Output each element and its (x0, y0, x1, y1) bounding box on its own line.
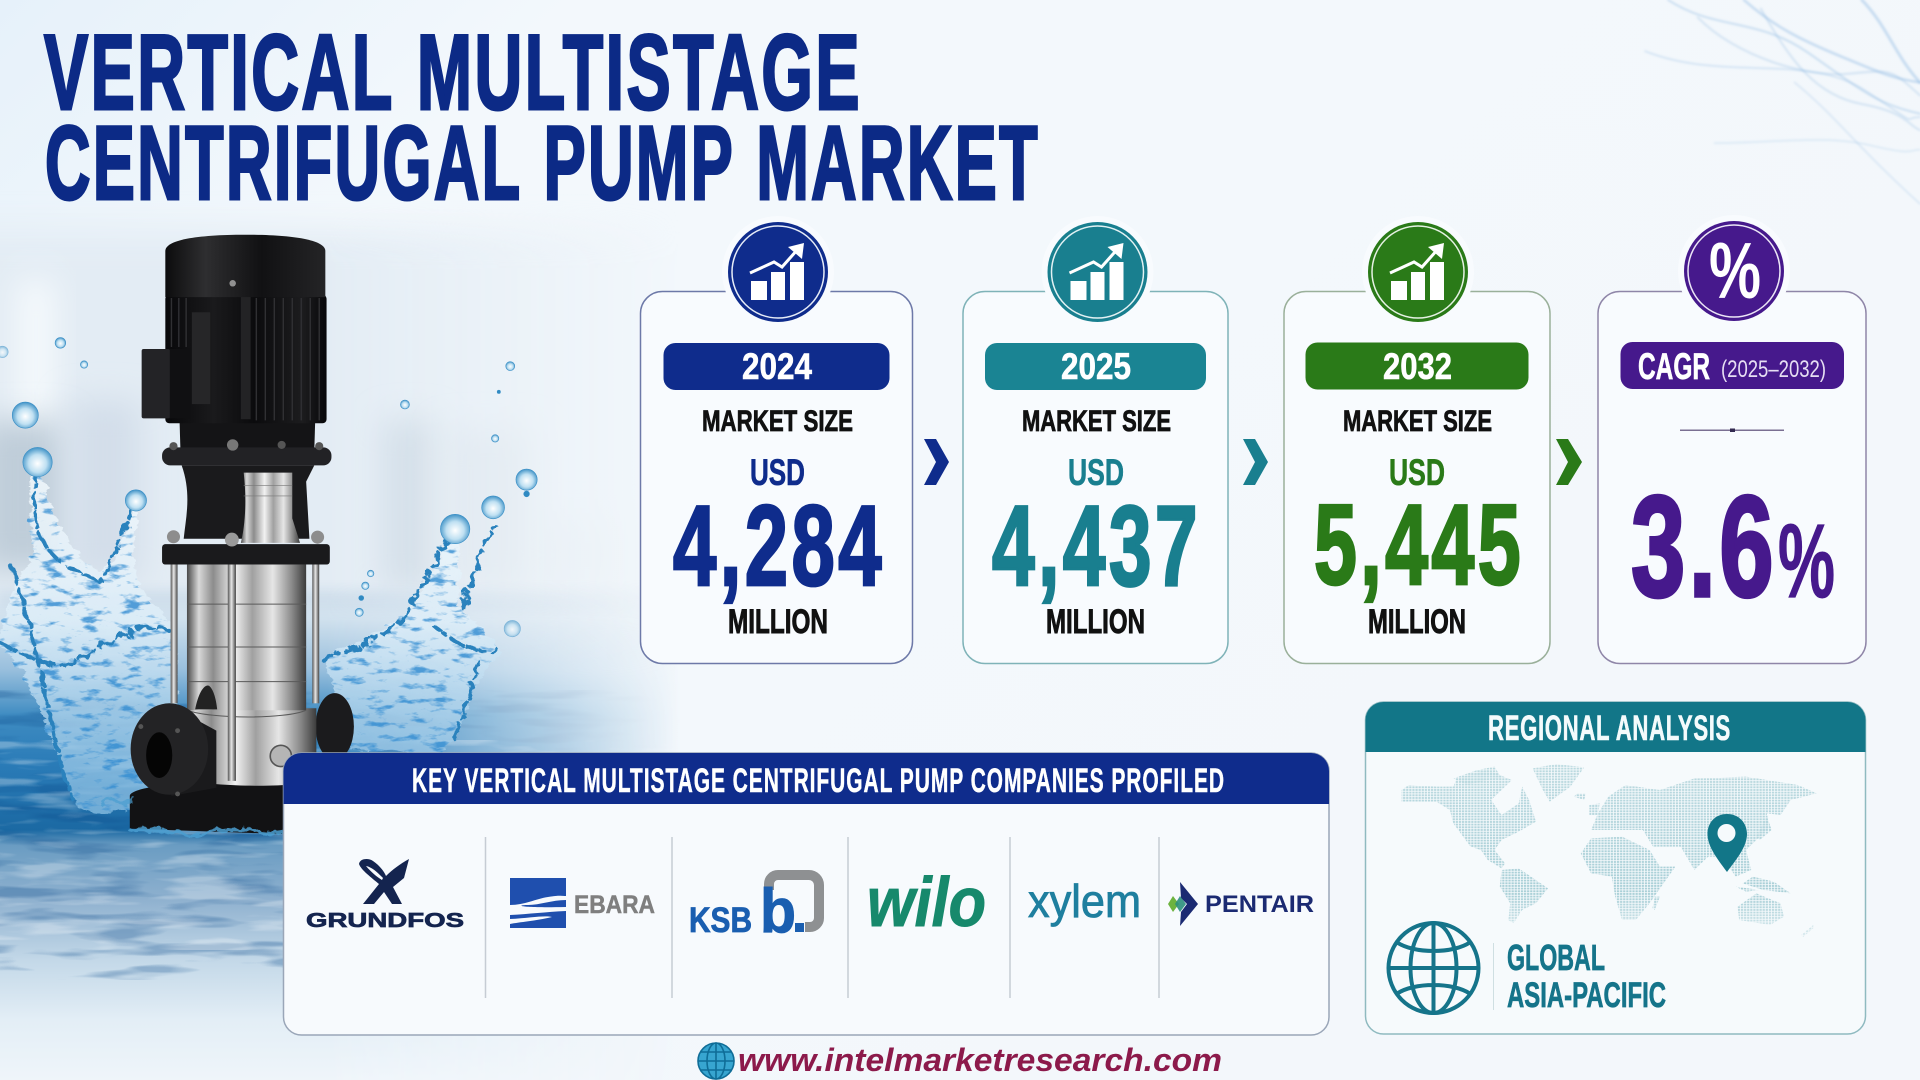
title: CENTRIFUGAL PUMP MARKET (45, 105, 1040, 222)
label market size 2032: MARKET SIZE (1343, 405, 1492, 438)
pump: bracket (182, 465, 314, 539)
panel: 2024 market size (640, 216, 912, 664)
pump: casing (182, 708, 316, 786)
value 4,437: 4,437 (992, 483, 1201, 610)
value percent sign: % (1778, 503, 1835, 620)
water splash (0, 235, 537, 835)
label global: GLOBAL (1507, 937, 1605, 978)
logo: Grundfos (306, 859, 464, 932)
splash: edge highlights (0, 469, 496, 800)
icon: web globe (698, 1043, 734, 1079)
label Asia-Pacific: ASIA-PACIFIC (1507, 976, 1666, 1015)
label million 2024: MILLION (728, 603, 828, 641)
companies panel body (284, 753, 1329, 1035)
label CAGR period: (2025–2032) (1721, 356, 1826, 383)
label USD 2024: USD (750, 452, 805, 493)
pump: motor fan cover (165, 235, 325, 297)
label USD 2032: USD (1389, 452, 1445, 493)
CAGR pill (1620, 342, 1844, 389)
icon: percent badge (1678, 215, 1790, 327)
label market size 2024: MARKET SIZE (702, 405, 853, 438)
arrow 3 (1556, 439, 1582, 485)
pump: shaft window (241, 473, 300, 543)
pump: tie rods (171, 565, 319, 781)
label USD 2025: USD (1068, 452, 1124, 493)
logo: Pentair (1168, 882, 1314, 926)
background: flowing water lines, top right (1645, 0, 1920, 204)
year pill 2024 (664, 343, 890, 390)
arrow 2 (1243, 439, 1268, 485)
panel: 2032 market size (1284, 216, 1550, 664)
label million 2032: MILLION (1368, 603, 1466, 641)
card frame 2025 (963, 292, 1228, 664)
water droplets (0, 338, 537, 637)
icon: globe (1388, 923, 1478, 1013)
year 2024: 2024 (742, 346, 812, 387)
splash: left crown (0, 461, 176, 812)
region divider (1493, 943, 1494, 1010)
icon: rising chart 2032 (1362, 216, 1474, 328)
pump: steel sleeve (187, 565, 306, 717)
card frame 2032 (1284, 292, 1550, 664)
divider (1680, 428, 1784, 432)
logo: Grundfos: GRUNDFOS (306, 910, 464, 932)
website footer (698, 1042, 1222, 1079)
icon: percent badge: % (1709, 226, 1761, 315)
panel: CAGR (1598, 215, 1866, 664)
vertical multistage pump (130, 235, 354, 835)
card frame 2024 (640, 292, 912, 664)
pump: right flange (316, 693, 354, 760)
companies header text: KEY VERTICAL MULTISTAGE CENTRIFUGAL PUMP COMPANIES PROFILED (412, 762, 1225, 800)
icon: rising chart 2025 (1042, 216, 1154, 328)
label CAGR: CAGR (1638, 346, 1710, 387)
year 2032: 2032 (1383, 346, 1452, 387)
pump: terminal box (142, 312, 210, 418)
regional header text: REGIONAL ANALYSIS (1488, 709, 1731, 748)
website address: www.intelmarketresearch.com (738, 1042, 1222, 1078)
pump: foot (130, 776, 302, 835)
logo: Ebara: EBARA (574, 891, 655, 919)
pump: motor body (165, 295, 327, 423)
logo: Xylem: xylem (1028, 875, 1141, 927)
icon: rising chart 2024 (722, 216, 834, 328)
photo background: blurred industrial plant (0, 229, 581, 612)
label million 2025: MILLION (1046, 603, 1145, 641)
value 4,284: 4,284 (673, 483, 885, 610)
logo: Pentair: PENTAIR (1205, 891, 1314, 918)
splash: foreground water at pump foot (102, 800, 286, 834)
arrow 1 (924, 439, 949, 485)
pump: left inlet flange (131, 703, 216, 796)
pump: neck (180, 422, 315, 450)
regional panel body (1366, 702, 1866, 1034)
pump: upper flange (162, 447, 331, 465)
pump: drain plug (270, 745, 291, 767)
logo: KSB: b (760, 877, 796, 946)
regional header bar (1366, 702, 1866, 752)
year pill 2032 (1306, 342, 1528, 390)
photo background: water surface (0, 608, 666, 1060)
year 2025: 2025 (1061, 346, 1131, 387)
title (44, 12, 1040, 222)
logo: Wilo: wilo (867, 863, 986, 941)
pump: lower flange (162, 439, 330, 565)
splash: right crown (322, 529, 500, 751)
world map (1402, 764, 1817, 937)
panel: 2025 market size (963, 216, 1228, 664)
card frame CAGR (1598, 292, 1866, 664)
year pill 2025 (985, 343, 1206, 390)
logo: KSB (689, 875, 819, 946)
value 5,445: 5,445 (1314, 482, 1524, 609)
logo: Ebara (510, 878, 655, 928)
label market size 2025: MARKET SIZE (1022, 405, 1171, 438)
panel: key companies (284, 753, 1329, 1035)
logo: KSB: KSB (689, 901, 752, 940)
icon: location pin (1708, 814, 1747, 872)
title: VERTICAL MULTISTAGE (44, 12, 862, 132)
panel: regional analysis (1366, 702, 1866, 1034)
value 3.6: 3.6 (1631, 466, 1777, 627)
companies header bar (284, 753, 1329, 804)
